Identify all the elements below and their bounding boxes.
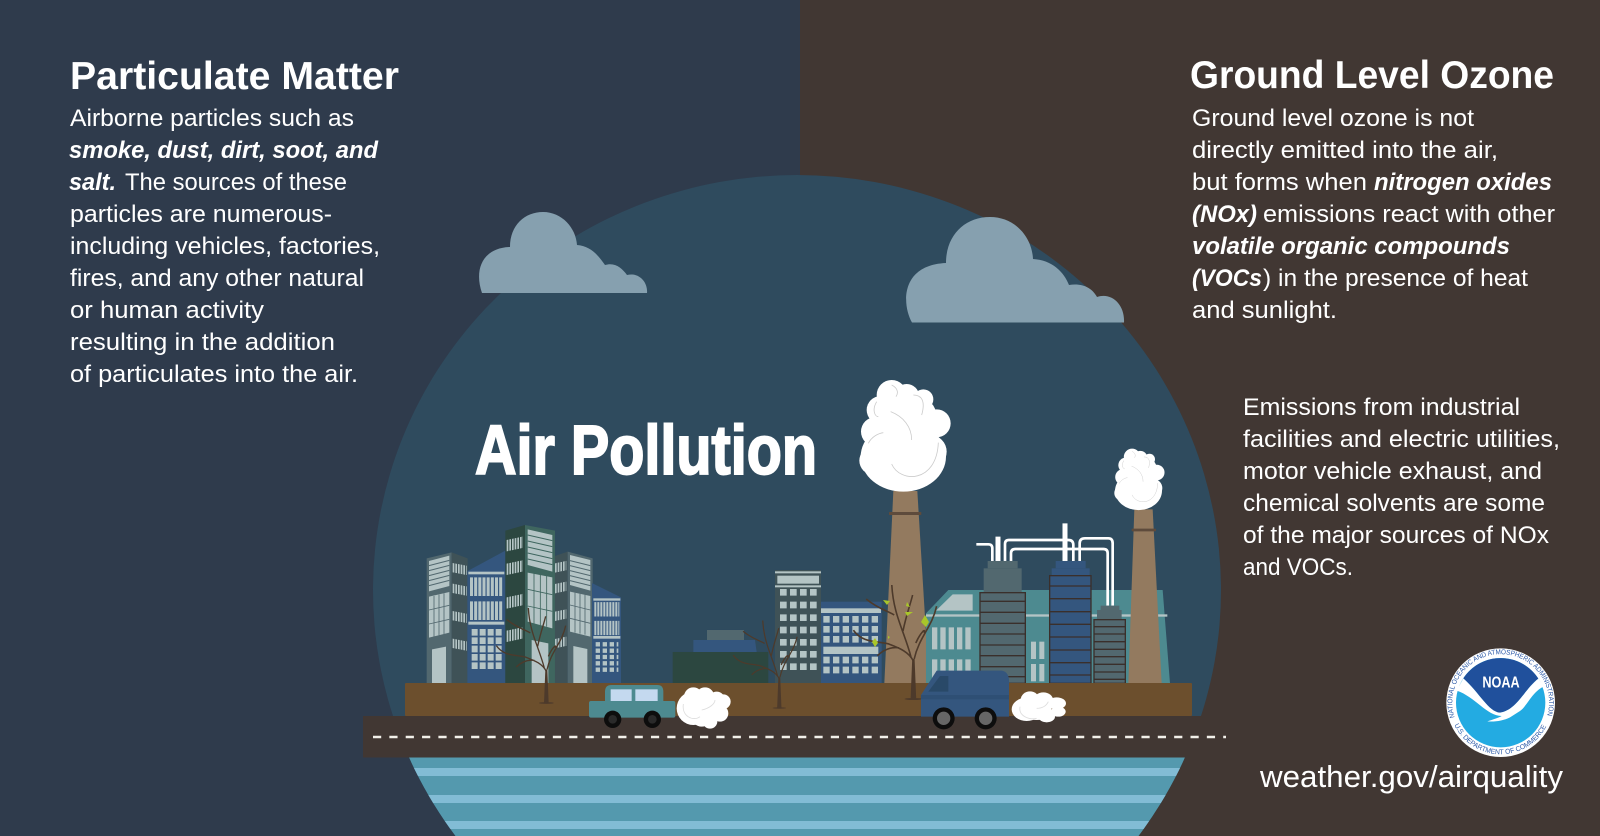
text block: emission sources: and VOCs. (1243, 554, 1353, 581)
text block: particulate matter description: fires, and any other natural (70, 265, 364, 292)
icon: teal car (589, 685, 675, 728)
text block: emission sources: of the major sources of NOx (1243, 522, 1549, 549)
building: blue office (821, 602, 882, 684)
text block: emission sources: chemical solvents are some (1243, 490, 1545, 517)
city skyline buildings (427, 525, 768, 684)
heading: Ground Level Ozone: Ground Level Ozone (1190, 54, 1554, 97)
link: weather.gov/airquality: weather.gov/airquality (1259, 759, 1564, 794)
text block: emission sources: facilities and electric utilities, (1243, 426, 1560, 453)
icon: tree left (496, 608, 566, 704)
text block: emission sources (1243, 394, 1560, 581)
text block: ground level ozone description: nitrogen oxides (1374, 169, 1552, 196)
building: teal factory hall (926, 590, 1170, 683)
text block: particulate matter description: resulting in the addition (70, 329, 335, 356)
icon: tree middle (733, 621, 797, 709)
text block: particulate matter description: particles are numerous- (70, 201, 332, 228)
text block: ground level ozone description: ) in the presence of heat (1263, 265, 1528, 292)
icon: small smoke plume (1114, 449, 1165, 510)
text block: emission sources: motor vehicle exhaust, and (1243, 458, 1542, 485)
text block: ground level ozone description (1192, 105, 1555, 324)
tower: small cooling tower (1094, 606, 1125, 683)
globe circle (373, 175, 1221, 836)
title: Air Pollution: Air Pollution (475, 411, 817, 489)
icon: large smoke plume (859, 380, 951, 492)
text block: particulate matter description: Airborne particles such as (70, 105, 354, 132)
text block: particulate matter description: The sources of these (125, 169, 347, 196)
text block: ground level ozone description: emissions react with other (1263, 201, 1555, 228)
icon: white pipes (976, 538, 1113, 606)
icon: NOAA logo: NOAA (1482, 674, 1520, 691)
icon: left cloud (479, 212, 647, 293)
icon: NOAA logo: NATIONAL OCEANIC AND ATMOSPHERIC ADMINISTRATION (1447, 649, 1554, 718)
building: grey office (775, 570, 821, 684)
icon: car exhaust cloud (677, 687, 731, 729)
text block: ground level ozone description: volatile organic compounds (1192, 233, 1510, 260)
water with stripes (380, 757, 1220, 836)
icon: right cloud (906, 217, 1124, 322)
text block: ground level ozone description: Ground level ozone is not (1192, 105, 1474, 132)
text block: particulate matter description: or human activity (70, 297, 265, 324)
panel: left background (0, 0, 800, 836)
building: tall green tower (505, 525, 555, 683)
factory complex (775, 380, 1170, 684)
text block: particulate matter description: of particulates into the air. (70, 361, 358, 388)
road centre dashes (373, 736, 1226, 738)
building: left tower (427, 552, 468, 684)
text block: particulate matter description: including vehicles, factories, (70, 233, 380, 260)
heading: Particulate Matter: Particulate Matter (70, 55, 399, 98)
icon: NOAA logo (1446, 648, 1555, 757)
text block: particulate matter description: salt. (69, 169, 116, 196)
text block: ground level ozone description: and sunlight. (1192, 297, 1337, 324)
building: right tower (555, 552, 593, 683)
tower: blue cooling tower (1050, 561, 1091, 683)
text block: ground level ozone description: (NOx) (1192, 201, 1257, 228)
building: blue right (592, 583, 621, 683)
icon: vertical pipes (998, 523, 1065, 561)
text block: emission sources: Emissions from industrial (1243, 394, 1520, 421)
text block: ground level ozone description: (VOCs (1192, 265, 1262, 292)
icon: NOAA logo: U.S. DEPARTMENT OF COMMERCE (1455, 723, 1546, 754)
icon: tree with leaves (853, 585, 937, 700)
building: low stepped block (673, 630, 768, 683)
panel: right background (800, 0, 1600, 836)
road (363, 716, 1227, 758)
building: blue left (467, 551, 505, 684)
tower: grey cooling tower (980, 561, 1025, 683)
text block: ground level ozone description: directly emitted into the air, (1192, 137, 1498, 164)
icon: small smokestack (1128, 509, 1162, 683)
ground strip (405, 683, 1192, 716)
text block: ground level ozone description: but forms when (1192, 169, 1367, 196)
text block: particulate matter description: smoke, dust, dirt, soot, and (69, 137, 379, 164)
icon: blue van (921, 671, 1009, 729)
icon: van exhaust cloud (1012, 691, 1066, 722)
text block: particulate matter description (69, 105, 380, 388)
icon: large smokestack (884, 491, 929, 683)
